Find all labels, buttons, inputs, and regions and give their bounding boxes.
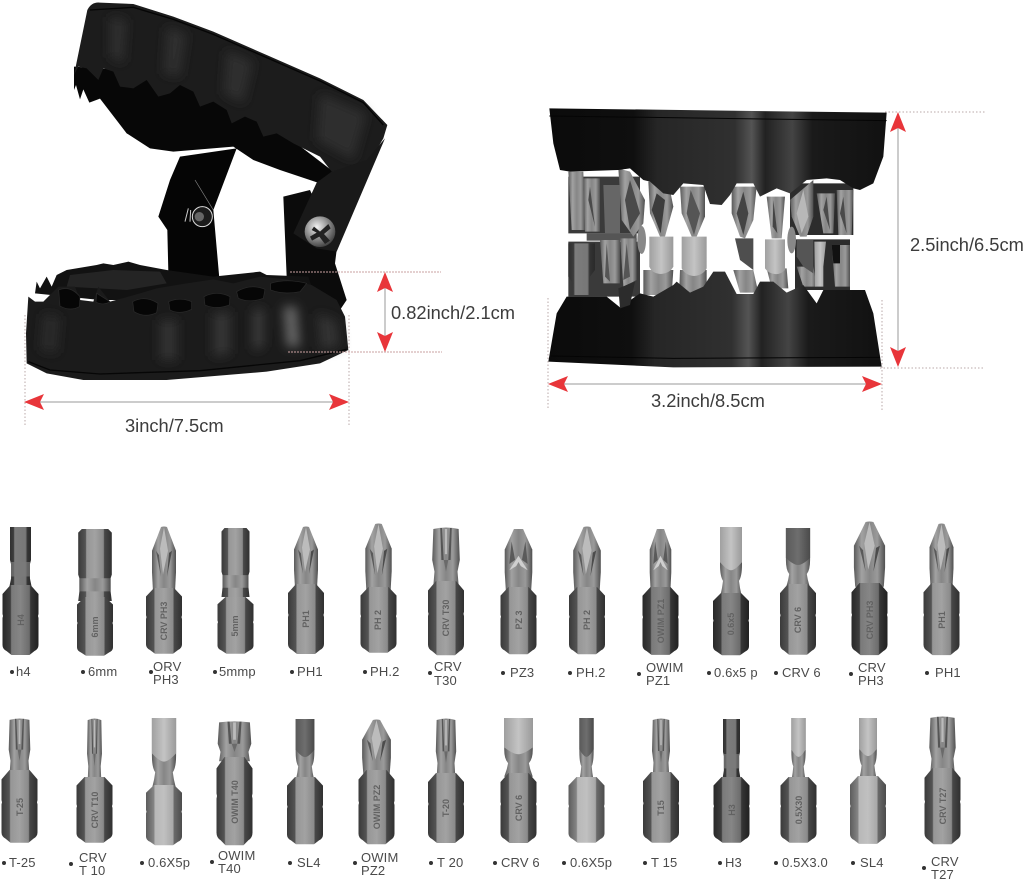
- label: 0.6X5p second: 0.6X5p: [570, 855, 612, 870]
- label: 0.6x5 p: 0.6x5 p: [714, 665, 758, 680]
- label: OWIM PZ2: PZ2: [361, 863, 385, 878]
- label: CRV T30: CRV: [434, 659, 462, 674]
- label: 5mmp: 5mmp: [219, 664, 256, 679]
- label: CRV T10: T 10: [79, 863, 105, 878]
- label: 6mm: 6mm: [88, 664, 117, 679]
- label: ORV PH3: PH3: [153, 672, 179, 687]
- bit: h4: H4: [16, 614, 26, 626]
- dimension: lower jaw height 0.82inch/2.1cm: 0.82inch/2.1cm: [391, 302, 515, 323]
- label: OWIM PZ2: [353, 850, 398, 878]
- dimension: open jaw width 3inch/7.5cm: [24, 315, 349, 436]
- bit: OWIM T40: OWIM T40: [230, 780, 240, 824]
- bit: 5mmp: [218, 528, 254, 654]
- label: ORV PH3: [149, 659, 182, 687]
- bit: CRV 6 row 2: [500, 718, 536, 843]
- label: PH1: PH1: [297, 664, 323, 679]
- label: CRV T10: [69, 850, 107, 878]
- bit: CRV T30: [428, 527, 464, 655]
- label: CRV 6 row 2: CRV 6: [501, 855, 540, 870]
- label: 0.5X3.0: 0.5X3.0: [782, 855, 828, 870]
- bit row 2: [2, 716, 960, 882]
- bit: PH.2: PH 2: [373, 610, 383, 630]
- label: CRV T10: CRV: [79, 850, 107, 865]
- product photo: closed jaw holding bits: [548, 108, 887, 367]
- bit: T-25: T-25: [15, 798, 25, 816]
- label: PZ3: PZ3: [510, 665, 534, 680]
- bit: PH1 second: PH1: [937, 611, 947, 629]
- label: PH.2: PH.2: [370, 664, 400, 679]
- label: OWIM T40: OWIM: [218, 848, 255, 863]
- label: OWIM PZ2: OWIM: [361, 850, 398, 865]
- label: CRV T30: T30: [434, 673, 457, 688]
- label: H3: H3: [725, 855, 742, 870]
- bit: CRV T30: CRV T30: [441, 600, 451, 636]
- bit: SL4 second: [850, 718, 886, 844]
- bit: CRV T10: [76, 719, 112, 843]
- bit row 1: [2, 521, 961, 688]
- label: CRV PH3: CRV: [858, 660, 886, 675]
- label: OWIM PZ1: [637, 660, 683, 688]
- bit: PZ3: [500, 529, 536, 654]
- label: CRV PH3: PH3: [858, 673, 884, 688]
- bit: OWIM PZ1: [642, 529, 678, 655]
- label: CRV T27: [922, 854, 959, 882]
- bit: OWIM T40: [216, 721, 252, 845]
- label: PH.2 second: PH.2: [576, 665, 606, 680]
- bit: PH1: PH1: [301, 610, 311, 628]
- label: OWIM T40: T40: [218, 861, 241, 876]
- label: OWIM T40: [210, 848, 255, 876]
- bit: OWIM PZ1: OWIM PZ1: [656, 599, 666, 643]
- bit: 0.5X3.0: [780, 718, 816, 843]
- bit: 5mmp: 5mm: [230, 615, 240, 637]
- dimension: closed jaw height 2.5inch/6.5cm: 2.5inch/6.5cm: [910, 234, 1024, 255]
- label: T-25: T-25: [9, 855, 36, 870]
- label: OWIM PZ1: OWIM: [646, 660, 683, 675]
- bit: 0.6x5 p: 0.6x5: [726, 613, 736, 635]
- bit: 0.5X3.0: 0.5X30: [794, 796, 804, 824]
- label: SL4: SL4: [297, 855, 321, 870]
- bit: 0.6X5p second: [568, 718, 604, 843]
- bit: SL4: [287, 719, 323, 844]
- bit: CRV PH3: [852, 521, 888, 655]
- label: PH1 second: PH1: [935, 665, 961, 680]
- product photo: open jaw bit holder: [26, 3, 387, 380]
- bit: T 20: [428, 718, 464, 843]
- label: 0.6X5p: 0.6X5p: [148, 855, 190, 870]
- bit: ORV PH3: [146, 526, 182, 654]
- bit: CRV 6: CRV 6: [793, 607, 803, 633]
- label: OWIM PZ1: PZ1: [646, 673, 670, 688]
- bit: H3: H3: [727, 804, 737, 816]
- label: CRV T27: T27: [931, 867, 954, 882]
- bit: CRV T27: CRV T27: [938, 788, 948, 824]
- bit: PH1: [288, 526, 324, 654]
- label: T 15: T 15: [651, 855, 677, 870]
- bit: 6mm: [77, 529, 113, 656]
- label: ORV PH3: ORV: [153, 659, 182, 674]
- bit: 0.6X5p: [146, 718, 182, 845]
- label: CRV 6: CRV 6: [782, 665, 821, 680]
- bit: 0.6x5 p: [713, 527, 749, 655]
- bit: PH.2: [360, 523, 396, 653]
- dimension: closed jaw width 3.2inch/8.5cm: [548, 298, 882, 411]
- dimension: open jaw width 3inch/7.5cm: 3inch/7.5cm: [125, 415, 224, 436]
- bit: PH1 second: [924, 523, 960, 655]
- label: h4: h4: [16, 664, 31, 679]
- bit: CRV T10: CRV T10: [90, 792, 100, 828]
- bit: T 15: [643, 718, 679, 843]
- bit: CRV PH3: CRV PH3: [865, 601, 875, 639]
- bit: H3: [714, 719, 750, 843]
- label: CRV T30: [428, 659, 462, 688]
- bit: PH.2 second: [569, 526, 605, 654]
- label: SL4 second: SL4: [860, 855, 884, 870]
- bit: ORV PH3: CRV PH3: [159, 602, 169, 640]
- bit: PH.2 second: PH 2: [582, 610, 592, 630]
- bit: 6mm: 6mm: [90, 616, 100, 638]
- dimension: closed jaw width 3.2inch/8.5cm: 3.2inch/8.5cm: [651, 390, 765, 411]
- label: CRV T27: CRV: [931, 854, 959, 869]
- bit: CRV T27: [924, 716, 960, 844]
- bit: T-25: [2, 718, 38, 843]
- dimension: closed jaw height 2.5inch/6.5cm: [880, 112, 1024, 368]
- bit: OWIM PZ2: [358, 720, 394, 844]
- bit: OWIM PZ2: OWIM PZ2: [372, 785, 382, 829]
- label: T 20: T 20: [437, 855, 463, 870]
- bit: T 15: T15: [656, 800, 666, 816]
- bit: T 20: T-20: [441, 799, 451, 817]
- bit: PZ3: PZ 3: [514, 610, 524, 630]
- dimension: lower jaw height 0.82inch/2.1cm: [288, 272, 515, 352]
- bit: h4: [2, 527, 38, 655]
- label: CRV PH3: [849, 660, 886, 688]
- bit: CRV 6: [780, 528, 816, 655]
- bit: CRV 6 row 2: CRV 6: [514, 795, 524, 821]
